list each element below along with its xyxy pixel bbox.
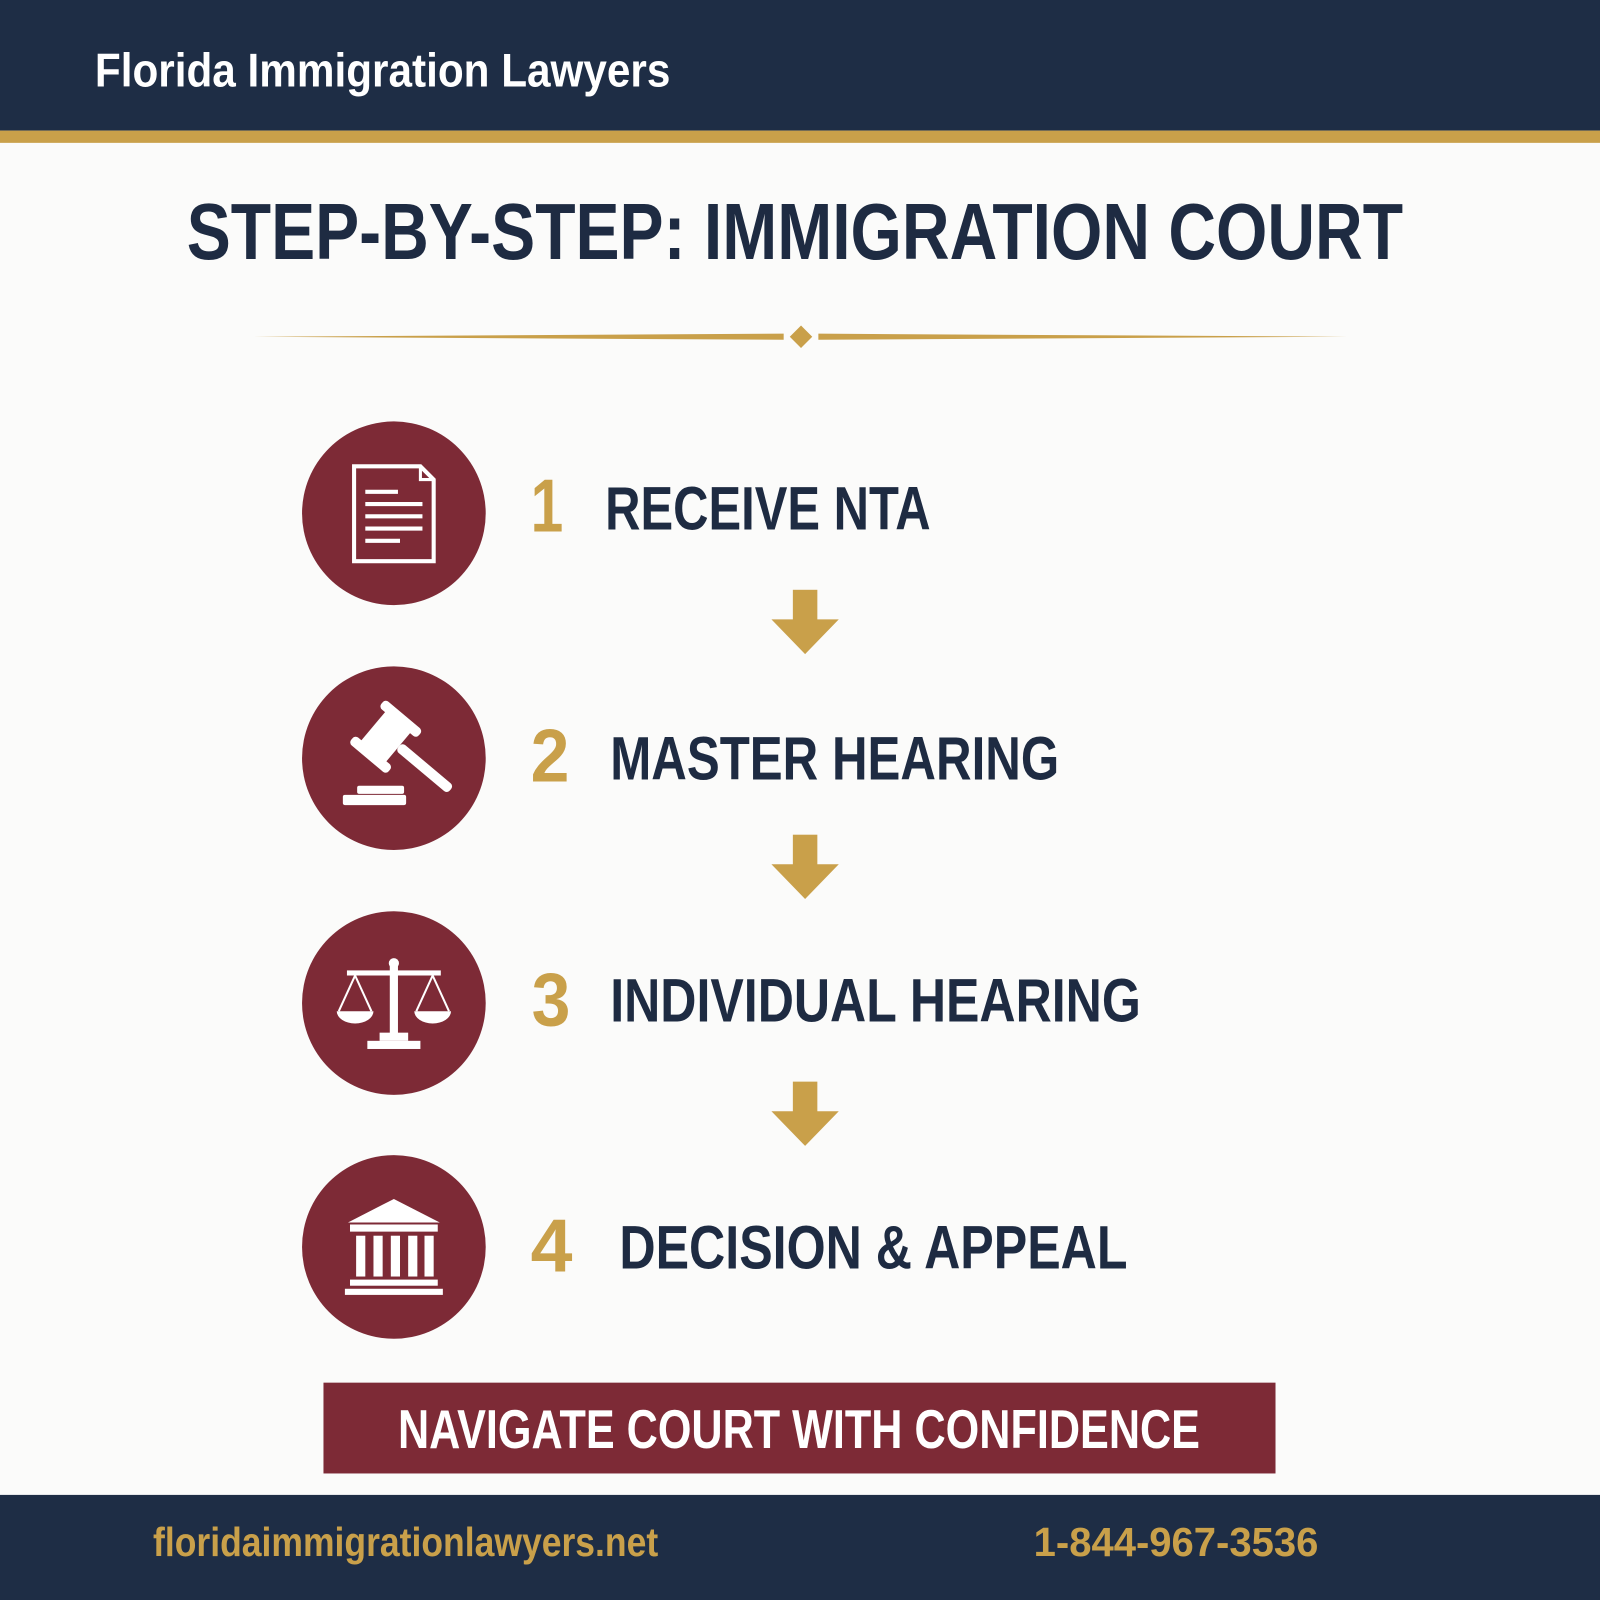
footer (0, 1495, 1600, 1600)
footer phone: 1-844-967-3536 (1034, 1519, 1318, 1565)
icon: scales (302, 911, 486, 1095)
step label 3: INDIVIDUAL HEARING (610, 966, 1141, 1034)
header text: Florida Immigration Lawyers (95, 45, 670, 97)
step number 2: 2 (531, 715, 569, 799)
icon: document (302, 421, 486, 605)
step 4 (302, 1155, 1128, 1339)
step label 4: DECISION & APPEAL (619, 1213, 1128, 1281)
icon: courthouse (302, 1155, 486, 1339)
step label 2: MASTER HEARING (610, 725, 1059, 793)
arrow 1 (771, 590, 839, 654)
icon: gavel (302, 666, 486, 850)
footer url: floridaimmigrationlawyers.net (153, 1519, 659, 1565)
step 3 (302, 911, 1141, 1095)
step number 3: 3 (532, 959, 570, 1043)
arrow 3 (771, 1082, 839, 1146)
step 2 (302, 666, 1059, 850)
step number 1: 1 (531, 465, 563, 549)
banner: navigate court: NAVIGATE COURT WITH CONFIDENCE (398, 1398, 1200, 1460)
banner: navigate court (323, 1383, 1276, 1473)
header bar (0, 0, 1600, 143)
arrow 2 (771, 835, 839, 899)
step 1 (302, 421, 931, 605)
title divider (250, 326, 1347, 348)
step number 4: 4 (531, 1204, 572, 1288)
step label 1: RECEIVE NTA (605, 475, 931, 543)
